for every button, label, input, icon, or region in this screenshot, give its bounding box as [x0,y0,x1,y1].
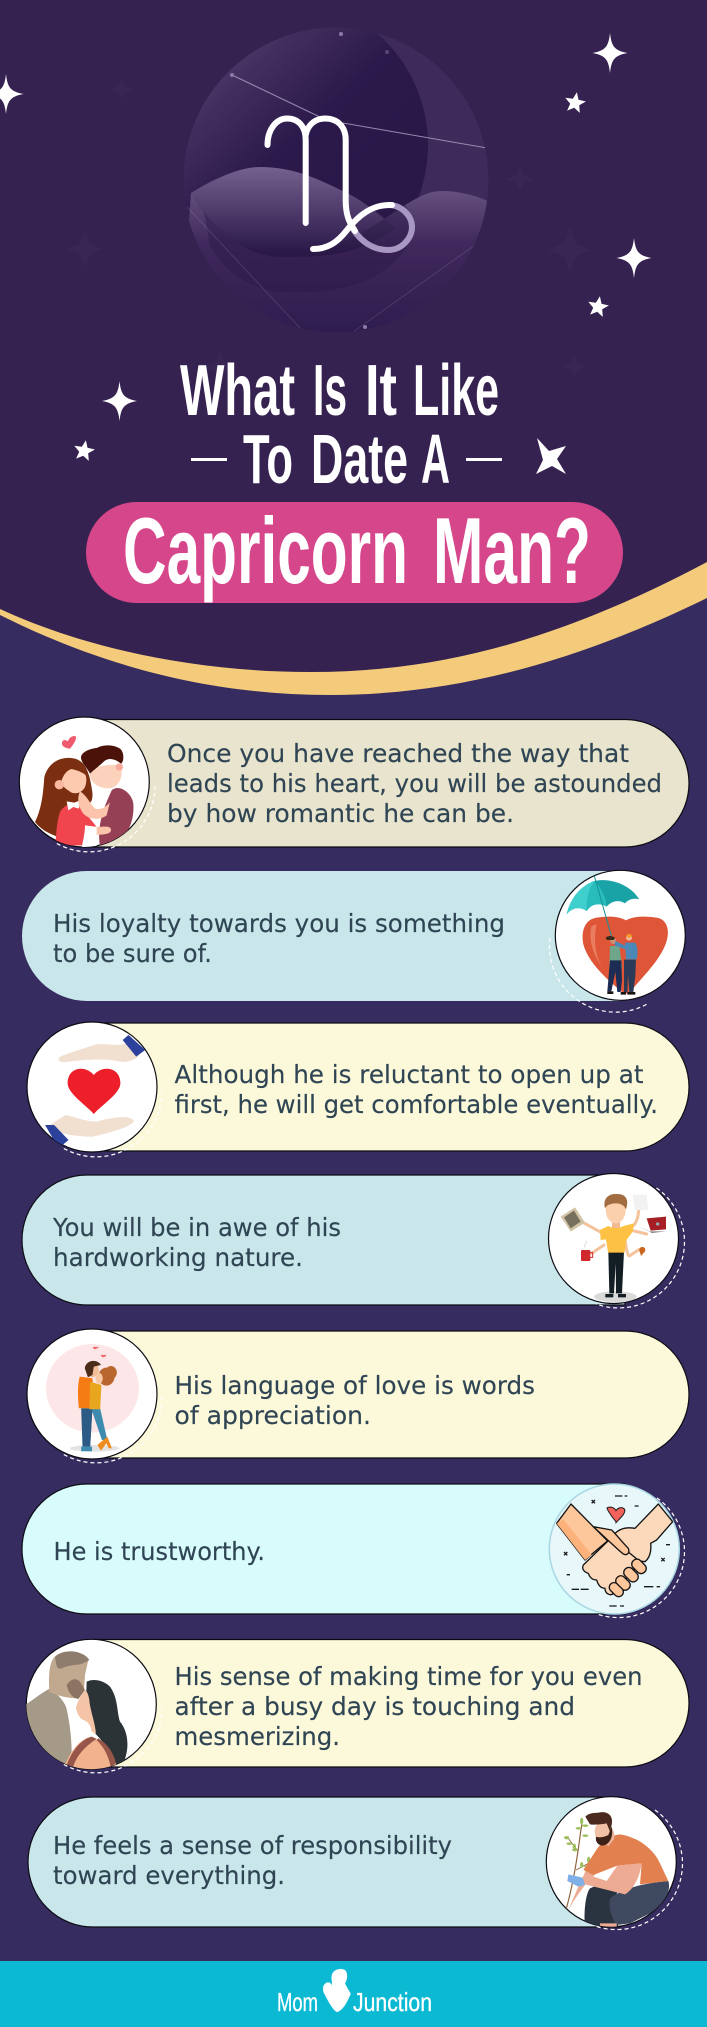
card 6: trustworthy [22,1484,684,1618]
title line 2: Date [311,420,408,498]
constellation dots [230,32,389,329]
logo: MomJunction [277,1969,432,2017]
card 1: romantic [19,717,689,852]
card 3: opening up [27,1022,689,1157]
zodiac sphere [132,0,490,340]
dashed arc [63,1707,162,1773]
dashed arc [63,1091,162,1157]
card text: toward everything. [53,1861,285,1890]
card text: Once you have reached the way that [167,739,629,768]
card text: first, he will get comfortable eventually. [174,1090,658,1119]
card text: Although he is reluctant to open up at [174,1060,644,1089]
icon: hands holding heart [27,1022,157,1152]
card shape [28,1797,620,1927]
card text: of appreciation. [174,1401,371,1430]
logo mark [323,1969,351,2012]
card text: hardworking nature. [53,1243,303,1272]
card shape [27,1023,689,1151]
card shape [22,1175,625,1305]
inner dark disc [184,30,428,219]
logo wordmark right: Junction [353,1987,432,2017]
card text: You will be in awe of his [52,1213,341,1242]
card 8: responsibility [28,1797,682,1930]
card text [53,909,505,968]
icon: kissing couple [27,1329,157,1459]
capricorn glyph [268,118,412,250]
card text: He is trustworthy. [54,1537,265,1566]
card text [174,1662,642,1751]
card text: His loyalty towards you is something [53,909,505,938]
card text [167,739,662,828]
icon: man planting tree [546,1797,676,1928]
upper wave hill [191,167,395,257]
icon: handshake with heart [549,1484,679,1614]
dashed arc [597,1498,684,1618]
icon: couple embracing [19,717,149,847]
card text [53,1831,452,1890]
card 2: loyalty [22,870,685,1012]
card text: His sense of making time for you even [174,1662,642,1691]
card text: by how romantic he can be. [167,799,514,828]
card text: He feels a sense of responsibility [53,1831,452,1860]
card text: after a busy day is touching and [174,1692,575,1721]
lower wave [180,191,490,340]
icon: couple under umbrella [555,870,685,1000]
icon: multitasking man [548,1174,678,1304]
footer background [0,1961,707,2027]
card text: leads to his heart, you will be astounded [167,769,662,798]
card text [174,1371,535,1430]
pill text: Capricorn [123,498,408,603]
title line 1 [180,351,499,431]
lower dark bowl [204,205,409,264]
card text: mesmerizing. [174,1722,340,1751]
card 7: making time [25,1639,689,1775]
card text [52,1213,341,1272]
title line 1: It [365,351,397,431]
icon: man kissing woman's forehead [25,1639,156,1775]
constellation lines [187,75,487,332]
faint background stars [66,78,592,384]
card text: His language of love is words [174,1371,535,1400]
footer band [0,1961,707,2027]
dashed arc [549,938,649,1012]
gold crescent curve [0,562,707,695]
card shape [22,1484,625,1614]
title line 2: To [243,420,293,498]
card shape [27,1640,689,1767]
title pill [86,498,623,603]
header dark background with curved edge [0,0,707,672]
title line 1: Like [413,351,499,431]
title line 2: A [421,420,450,498]
card shape [20,720,689,847]
pill shape [86,502,623,603]
title line 2 [243,420,450,498]
dashed arc [595,1810,682,1930]
logo wordmark left: Mom [277,1987,318,2017]
sphere base [184,28,488,332]
card shape [22,871,620,1001]
card shape [27,1331,689,1458]
title line 1: Is [313,351,347,431]
dashed arc [596,1188,684,1308]
title dashes [191,458,502,461]
card text: to be sure of. [53,939,212,968]
card 4: hardworking [22,1174,684,1308]
sparkle stars [0,33,652,474]
dashed arc [63,1397,162,1463]
dashed arc [56,786,155,852]
card text [174,1060,658,1119]
pill text: Man? [433,498,591,603]
title line 1: What [180,351,295,431]
card 5: language of love [27,1329,689,1463]
